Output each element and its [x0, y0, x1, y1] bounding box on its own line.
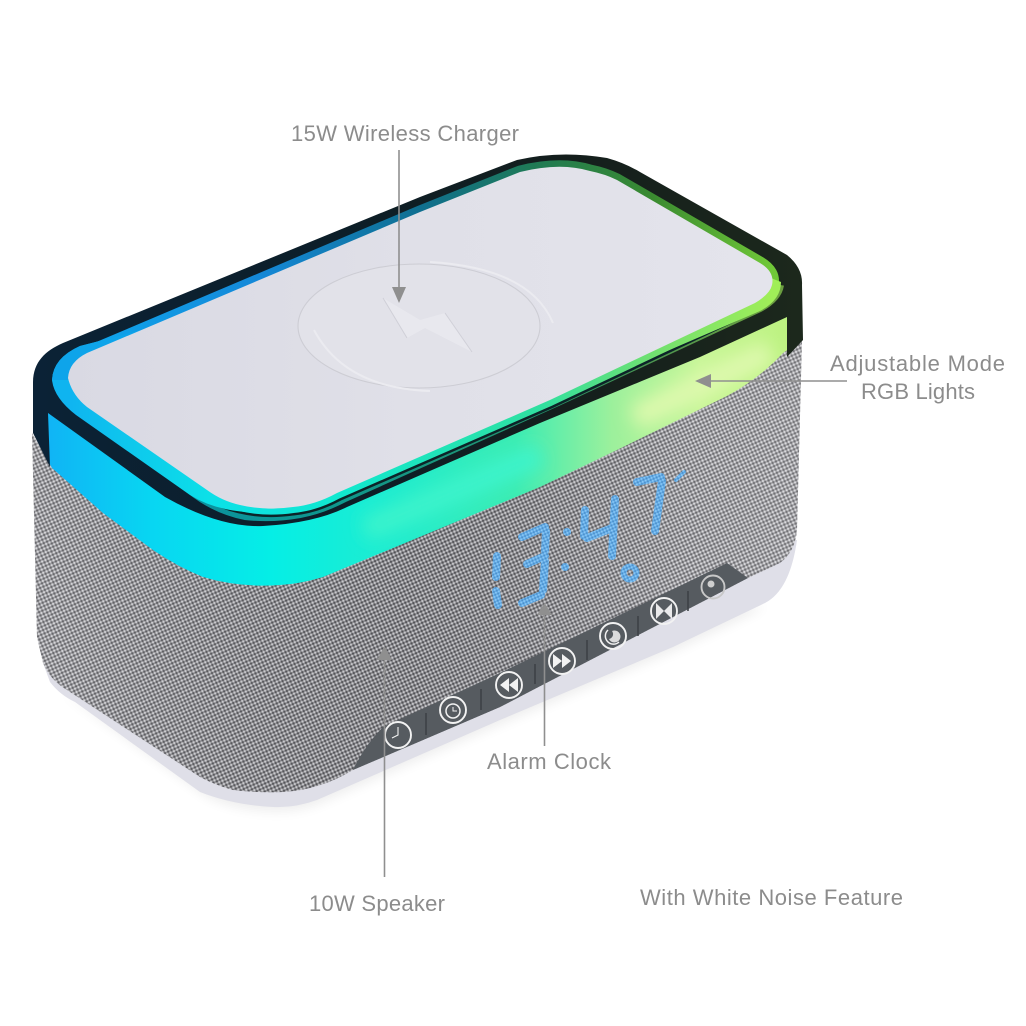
- wireless charging disc: [298, 262, 553, 391]
- label: 10W Speaker: 10W Speaker: [309, 891, 445, 916]
- button strip: [353, 563, 748, 770]
- disc highlight arc, lower left: [314, 330, 430, 391]
- arrow: RGB lights: [695, 374, 847, 388]
- lightning bolt icon: [383, 298, 472, 352]
- soft ground shadow: [60, 600, 765, 811]
- label: 15W Wireless Charger: 15W Wireless Charger: [291, 121, 519, 146]
- label: Adjustable Mode RGB Lights: RGB Lights: [861, 379, 975, 404]
- RGB light band: [40, 300, 800, 600]
- channel: widened green right corner: [500, 270, 781, 423]
- base plinth: [43, 540, 797, 807]
- label: Alarm Clock: Alarm Clock: [487, 749, 612, 774]
- lit channel, top edge: [68, 167, 772, 378]
- dark transparent rim: [33, 154, 803, 526]
- lit channel, lower edge: [68, 285, 772, 509]
- channel: widened blue left corner and lower-left wedge: [52, 322, 250, 512]
- thin inner reflection line, lower: [62, 285, 780, 517]
- arrow: wireless charger: [392, 150, 406, 303]
- disc highlight arc, upper right: [430, 262, 553, 323]
- white charging top plate: [68, 167, 772, 509]
- button glyphs: [500, 580, 714, 692]
- arrow: alarm clock: [537, 603, 552, 746]
- button icons: [385, 576, 724, 748]
- strip dividers: [426, 591, 688, 735]
- label: Adjustable Mode RGB Lights: [830, 351, 1005, 404]
- product: clock speaker device: [32, 154, 803, 811]
- fabric speaker grille: [32, 340, 802, 792]
- dark separator, lower: [68, 285, 772, 509]
- label: Adjustable Mode RGB Lights: Adjustable Mode: [830, 351, 1005, 376]
- label: With White Noise Feature: With White Noise Feature: [640, 885, 903, 910]
- LED clock display 13:47: [496, 472, 684, 605]
- channel: top-left blue tint: [52, 320, 180, 380]
- arrow: speaker: [377, 646, 392, 877]
